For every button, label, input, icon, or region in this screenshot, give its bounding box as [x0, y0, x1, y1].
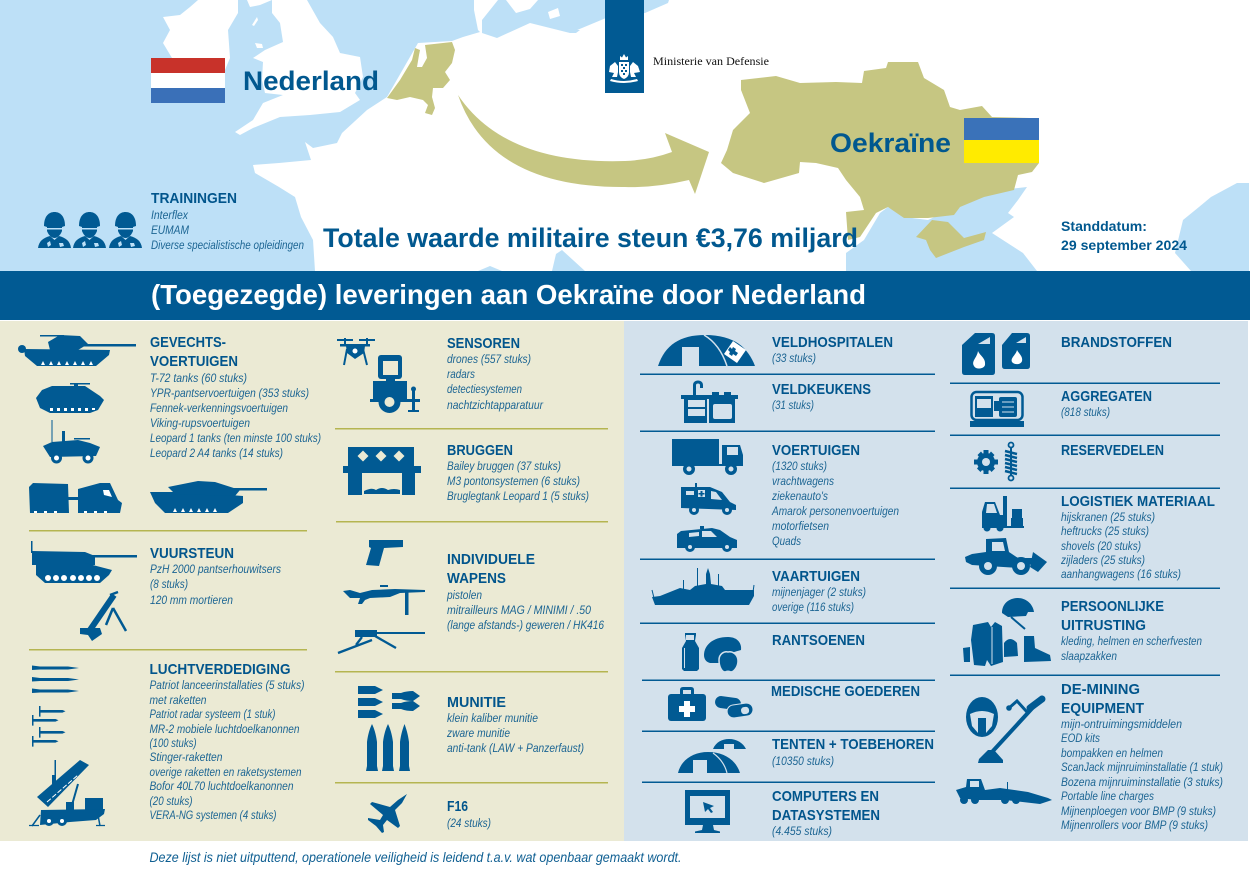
list: (1320 stuks) — [772, 459, 827, 473]
list: Bozena mijnruiminstallatie (3 stuks) — [1061, 775, 1223, 789]
heading: SENSOREN — [447, 335, 520, 352]
icon: truck — [672, 439, 743, 475]
list: Amarok personenvoertuigen — [771, 504, 899, 518]
heading: WAPENS — [447, 570, 506, 587]
list: (8 stuks) — [150, 577, 188, 591]
list: met raketten — [150, 693, 207, 707]
icon: machine gun — [343, 585, 425, 615]
list — [150, 562, 281, 607]
list — [150, 678, 304, 822]
flag: Netherlands — [151, 58, 225, 103]
list: (lange afstands-) geweren / HK416 — [447, 618, 604, 632]
list: Bruglegtank Leopard 1 (5 stuks) — [447, 489, 589, 503]
list: Mijnenrollers voor BMP (9 stuks) — [1061, 818, 1208, 832]
count: (31 stuks) — [772, 398, 814, 412]
section: de-mining equipment — [956, 681, 1223, 832]
count: (818 stuks) — [1061, 405, 1110, 419]
list: hijskranen (25 stuks) — [1061, 510, 1155, 524]
heading: PERSOONLIJKE — [1061, 598, 1164, 615]
list: Leopard 2 A4 tanks (14 stuks) — [150, 446, 283, 460]
list — [447, 352, 544, 412]
icon: jerrycans — [962, 333, 1030, 375]
list: detectiesystemen — [447, 382, 522, 396]
logo: Rijksoverheid — [605, 0, 644, 93]
section: vuursteun — [31, 541, 281, 641]
footnote: Deze lijst is niet uitputtend, operationele veiligheid is leidend t.a.v. wat openbaar gemaakt wordt. — [150, 849, 682, 865]
list: pistolen — [446, 588, 482, 602]
count: (10350 stuks) — [772, 754, 834, 768]
icon: ship — [652, 568, 754, 605]
section: computers — [685, 788, 880, 838]
list: kleding, helmen en scherfvesten — [1061, 634, 1202, 648]
list: mijnenjager (2 stuks) — [772, 585, 866, 599]
heading — [150, 334, 238, 370]
list: radars — [447, 367, 475, 381]
icon: Patriot launcher — [29, 760, 105, 826]
list: motorfietsen — [772, 519, 829, 533]
list: overige raketten en raketsystemen — [150, 765, 302, 779]
list: vrachtwagens — [772, 474, 834, 488]
list — [151, 208, 304, 252]
icon: pistol — [366, 540, 403, 566]
icon: tents — [678, 739, 746, 773]
icon: T-72 tank — [18, 335, 136, 366]
icon: helmet, vest, pouch and boot — [963, 598, 1051, 666]
icon: Leopard 2 tank — [150, 481, 267, 513]
label: Nederland: Nederland — [243, 66, 379, 96]
list: slaapzakken — [1061, 649, 1117, 663]
icon: rifle — [338, 630, 425, 653]
list: mijn-ontruimingsmiddelen — [1061, 717, 1182, 731]
list: zijladers (25 stuks) — [1060, 553, 1145, 567]
section: F16 — [368, 794, 491, 833]
icon: PzH 2000 howitzer — [31, 541, 137, 583]
heading — [1061, 598, 1164, 634]
heading: LUCHTVERDEDIGING — [150, 661, 290, 678]
list: Patriot lanceerinstallaties (5 stuks) — [150, 678, 304, 692]
icon: monitor — [685, 790, 730, 833]
list: mitrailleurs MAG / MINIMI / .50 — [447, 603, 591, 617]
panel: trainingen — [38, 190, 304, 252]
list — [1061, 717, 1223, 832]
list — [446, 588, 604, 632]
icon: capsules — [714, 695, 754, 719]
heading: DE-MINING — [1061, 681, 1140, 698]
icon: mortar — [80, 592, 126, 641]
list: EOD kits — [1061, 731, 1100, 745]
icon: missiles — [32, 666, 79, 747]
heading: INDIVIDUELE — [447, 551, 535, 568]
list — [447, 459, 589, 503]
heading: VELDKEUKENS — [772, 381, 871, 398]
list: Viking-rupsvoertuigen — [150, 416, 250, 430]
section: brandstoffen — [962, 333, 1172, 375]
section: tenten — [678, 736, 934, 773]
section: medische goederen — [668, 683, 920, 721]
icon: generator — [970, 392, 1024, 427]
list — [772, 585, 866, 614]
list: drones (557 stuks) — [447, 352, 531, 366]
heading: GEVECHTS- — [150, 334, 226, 351]
flag: Ukraine — [964, 118, 1039, 163]
icon: radar trailer — [370, 355, 420, 413]
heading: BRUGGEN — [447, 442, 513, 459]
list: anti-tank (LAW + Panzerfaust) — [447, 741, 584, 755]
heading: DATASYSTEMEN — [772, 807, 880, 824]
heading: VAARTUIGEN — [772, 568, 860, 585]
list: M3 pontonsystemen (6 stuks) — [447, 474, 580, 488]
section: voertuigen — [672, 439, 899, 552]
list: 120 mm mortieren — [150, 593, 233, 607]
list: Interflex — [151, 208, 189, 222]
list: zware munitie — [446, 726, 510, 740]
heading: VOERTUIGEN — [150, 353, 238, 370]
icon: mine detector — [978, 699, 1042, 763]
section: persoonlijke uitrusting — [963, 598, 1202, 666]
list: Leopard 1 tanks (ten minste 100 stuks) — [150, 431, 321, 445]
heading: TRAININGEN — [151, 190, 237, 207]
map background — [0, 0, 1250, 272]
list — [1061, 634, 1202, 663]
heading — [772, 788, 880, 824]
icon: Viking vehicle — [29, 483, 122, 513]
section: logistiek materiaal — [965, 493, 1215, 581]
heading: LOGISTIEK MATERIAAL — [1061, 493, 1215, 510]
map: Netherlands — [387, 42, 455, 115]
list: Diverse specialistische opleidingen — [151, 238, 304, 252]
section: luchtverdediging — [29, 661, 304, 826]
arrow from Netherlands to Ukraine — [458, 95, 709, 194]
heading: EQUIPMENT — [1061, 700, 1144, 717]
list — [1060, 510, 1181, 581]
icon: wheel loader — [965, 538, 1047, 575]
icon: forklift — [982, 496, 1024, 532]
list: aanhangwagens (16 stuks) — [1061, 567, 1181, 581]
icon: ambulance — [681, 483, 736, 515]
heading: UITRUSTING — [1061, 617, 1146, 634]
heading: VUURSTEUN — [150, 545, 234, 562]
list: Mijnenploegen voor BMP (9 stuks) — [1061, 804, 1216, 818]
heading: VOERTUIGEN — [772, 442, 860, 459]
icon: bridge — [343, 447, 421, 495]
heading — [447, 551, 535, 587]
heading: COMPUTERS EN — [772, 788, 879, 805]
heading: VELDHOSPITALEN — [772, 334, 893, 351]
list: ziekenauto's — [771, 489, 828, 503]
list: nachtzichtapparatuur — [447, 398, 544, 412]
icon: field hospital — [658, 335, 755, 366]
icon: gear and spring — [974, 442, 1017, 480]
date stamp — [1061, 218, 1187, 253]
icon: car — [677, 526, 737, 552]
title band: (Toegezegde) leveringen aan Oekraïne door Nederland — [151, 279, 866, 310]
heading: RANTSOENEN — [772, 632, 865, 649]
count: (24 stuks) — [447, 816, 491, 830]
icon: medical kit — [668, 687, 706, 721]
section: bruggen — [343, 442, 589, 503]
section: individuele wapens — [338, 540, 604, 653]
section: aggregaten — [970, 388, 1152, 427]
heading — [1061, 681, 1144, 717]
icon: field kitchen — [681, 380, 738, 423]
icon: F16 jet — [368, 794, 407, 833]
list: Bailey bruggen (37 stuks) — [447, 459, 561, 473]
list: MR-2 mobiele luchtdoelkanonnen — [150, 722, 300, 736]
list — [771, 459, 899, 548]
label: Oekraïne: Oekraïne — [830, 128, 951, 158]
section: munitie — [358, 686, 584, 771]
title band — [0, 271, 1250, 320]
list: T-72 tanks (60 stuks) — [150, 371, 247, 385]
list: Quads — [772, 534, 801, 548]
list: PzH 2000 pantserhouwitsers — [150, 562, 281, 576]
section: vaartuigen — [652, 568, 866, 614]
section: gevechtsvoertuigen — [18, 334, 321, 513]
icon: YPR armoured vehicle — [36, 383, 104, 413]
icon: milk, bread and apple — [682, 633, 741, 672]
date stamp: Standdatum: — [1061, 218, 1147, 234]
icon: Fennek vehicle — [43, 420, 100, 464]
heading: MUNITIE — [447, 694, 506, 711]
list: shovels (20 stuks) — [1061, 539, 1141, 553]
heading: F16 — [447, 798, 468, 815]
section: sensoren — [337, 335, 544, 413]
panel: beige background — [0, 321, 624, 841]
map: Ukraine — [721, 62, 1039, 258]
heading: RESERVEDELEN — [1061, 442, 1164, 459]
list: Fennek-verkenningsvoertuigen — [150, 401, 288, 415]
heading: AGGREGATEN — [1061, 388, 1152, 405]
icon: mine clearing vehicle — [956, 779, 1052, 804]
count: (33 stuks) — [772, 351, 816, 365]
list: Stinger-raketten — [150, 750, 223, 764]
list: Bofor 40L70 luchtdoelkanonnen — [150, 779, 294, 793]
list: heftrucks (25 stuks) — [1061, 524, 1149, 538]
list: Patriot radar systeem (1 stuk) — [150, 707, 276, 721]
icon: drone — [337, 338, 375, 365]
list: (20 stuks) — [150, 794, 192, 808]
total value headline: Totale waarde militaire steun €3,76 miljard — [323, 223, 858, 253]
list: klein kaliber munitie — [447, 711, 538, 725]
list: ScanJack mijnruiminstallatie (1 stuk) — [1061, 760, 1223, 774]
list: overige (116 stuks) — [772, 600, 854, 614]
icon: three soldiers — [38, 212, 142, 248]
section: veldhospitalen — [658, 334, 893, 366]
section: veldkeukens — [681, 380, 871, 423]
list: (100 stuks) — [150, 736, 196, 750]
ministry name: Ministerie van Defensie — [653, 54, 769, 68]
list: EUMAM — [151, 223, 189, 237]
heading: TENTEN + TOEBEHOREN — [772, 736, 934, 753]
list: YPR-pantservoertuigen (353 stuks) — [150, 386, 309, 400]
list — [446, 711, 584, 755]
list: Portable line charges — [1061, 789, 1154, 803]
section: rantsoenen — [682, 632, 865, 672]
list: VERA-NG systemen (4 stuks) — [150, 808, 277, 822]
icon: bomb helmet — [966, 697, 998, 737]
heading: MEDISCHE GOEDEREN — [771, 683, 920, 700]
date stamp: 29 september 2024 — [1061, 237, 1187, 253]
heading: BRANDSTOFFEN — [1061, 334, 1172, 351]
list: bompakken en helmen — [1061, 746, 1163, 760]
list — [150, 371, 321, 460]
panel: blue background — [624, 321, 1248, 841]
count: (4.455 stuks) — [772, 824, 832, 838]
icon: ammunition — [358, 686, 420, 771]
section: reservedelen — [974, 442, 1164, 480]
